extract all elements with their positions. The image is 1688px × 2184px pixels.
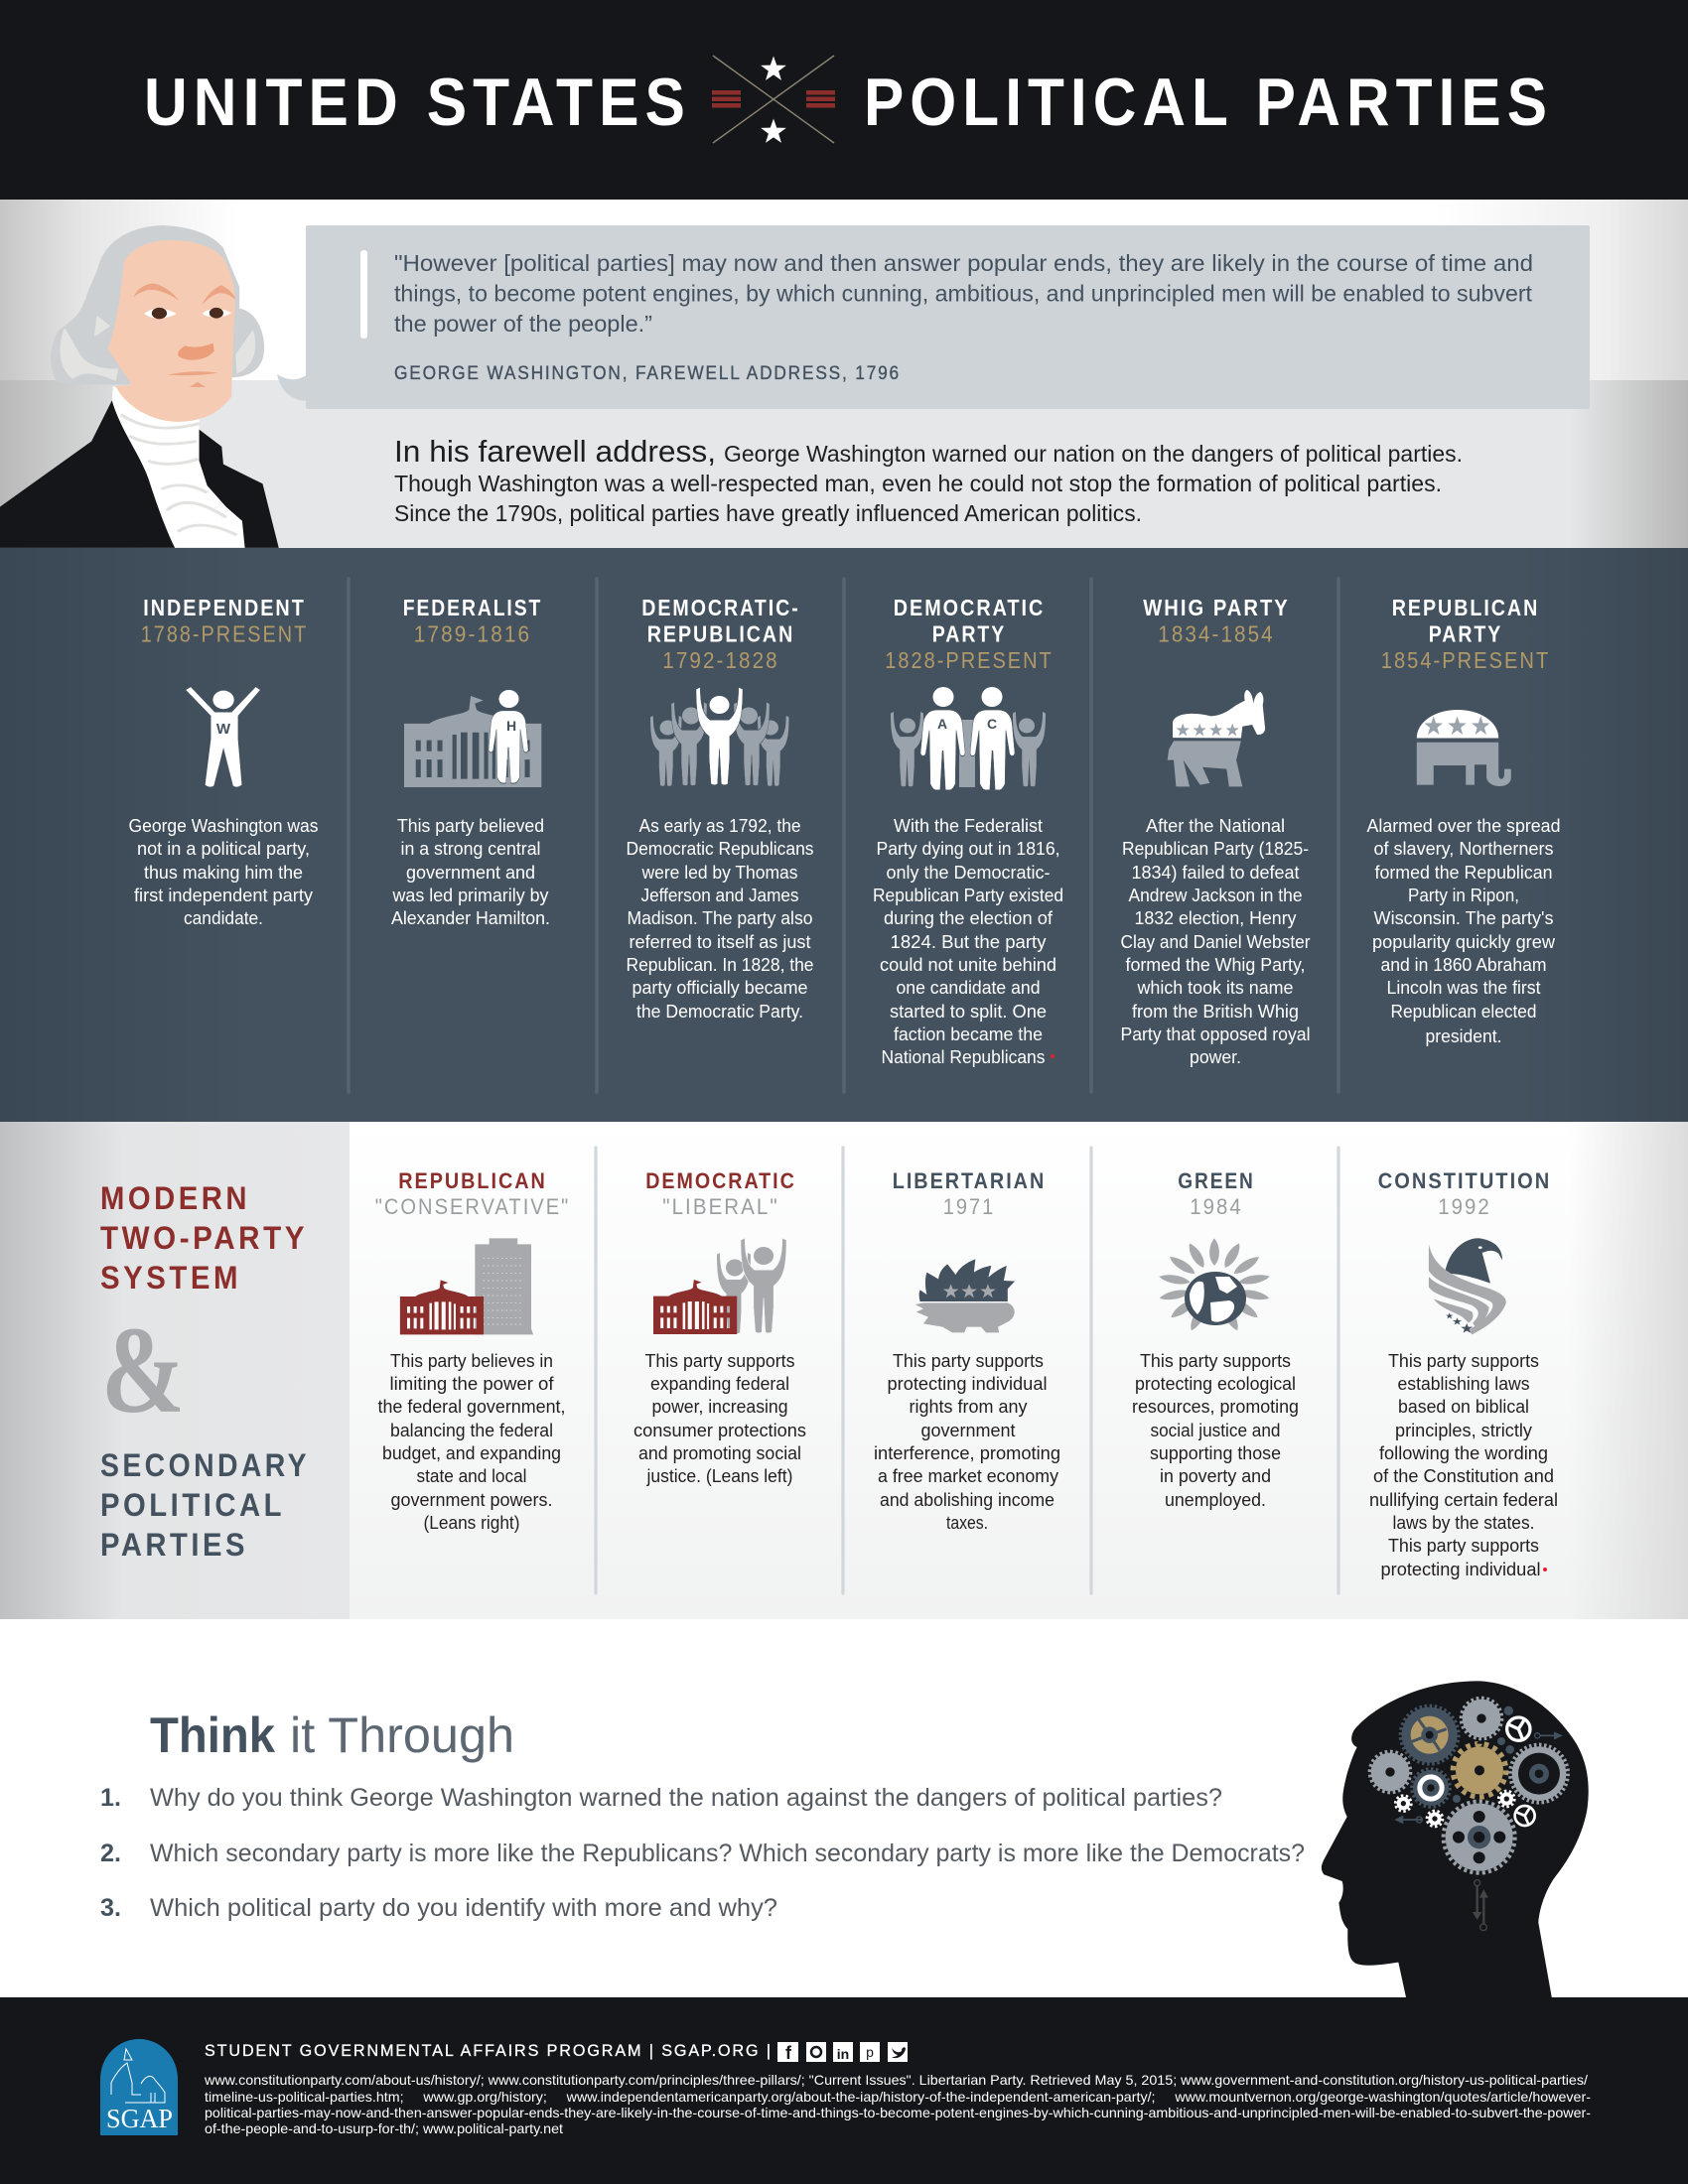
- description: [1120, 816, 1311, 1067]
- gear: grey upper: [1461, 1698, 1502, 1739]
- description: rights from any: [910, 1397, 1027, 1417]
- title: political parties: POLITICAL PARTIES: [864, 65, 1553, 140]
- sources: [204, 2072, 1591, 2136]
- heading: "CONSERVATIVE": [375, 1194, 570, 1219]
- heading: [641, 595, 800, 673]
- description: This party believes in: [390, 1351, 553, 1371]
- heading: 1834-1854: [1158, 621, 1275, 647]
- heading: GREEN: [1178, 1168, 1255, 1193]
- description: faction became the: [894, 1024, 1043, 1044]
- heading: 1984: [1190, 1194, 1243, 1219]
- heading: INDEPENDENT: [143, 595, 306, 620]
- heading: [1381, 595, 1550, 673]
- heading: DEMOCRATIC: [894, 595, 1045, 620]
- description: protecting individual: [1380, 1560, 1541, 1579]
- description: protecting ecological: [1135, 1374, 1296, 1394]
- header band: [0, 0, 1688, 200]
- description: Party dying out in 1816,: [876, 839, 1060, 859]
- heading: REPUBLICAN: [647, 621, 794, 647]
- heading: secondary political parties: POLITICAL: [100, 1487, 285, 1523]
- description: Republican Party existed: [873, 886, 1063, 905]
- title: united states: UNITED STATES: [144, 65, 691, 140]
- heading: secondary political parties: PARTIES: [100, 1527, 248, 1563]
- description: from the British Whig: [1132, 1002, 1299, 1022]
- description: first independent party: [134, 886, 313, 905]
- description: one candidate and: [896, 978, 1041, 998]
- description: [873, 816, 1063, 1067]
- heading: 1792-1828: [662, 647, 779, 673]
- heading: 1788-PRESENT: [141, 621, 308, 647]
- heading: Think: [150, 1707, 275, 1763]
- question 1: Why do you think George Washington warned the nation against the dangers of political parties?: [150, 1784, 1222, 1812]
- description: unemployed.: [1165, 1490, 1266, 1510]
- description: in a strong central: [401, 839, 540, 859]
- heading: DEMOCRATIC: [645, 1168, 796, 1193]
- white wheels: [1507, 1717, 1535, 1826]
- quote text: "However [political parties] may now and then answer popular ends, they are likely in the course of time and: [394, 250, 1533, 276]
- icon: globe and sunflower: [1158, 1239, 1271, 1332]
- description: 1832 election, Henry: [1134, 908, 1297, 928]
- description: After the National: [1146, 816, 1285, 836]
- description: supporting those: [1150, 1443, 1281, 1463]
- description: power, increasing: [651, 1397, 788, 1417]
- description: could not unite behind: [880, 955, 1056, 975]
- heading: REPUBLICAN: [1392, 595, 1539, 620]
- sources: timeline-us-political-parties.htm; www.gp.org/history; www.independentamericanparty.org/about-the-iap/history-of-the-independent-american-party/; www.mountvernon.org/george-washington/quotes/article/however-: [205, 2089, 1591, 2105]
- icon: donkey: [1168, 690, 1265, 786]
- heading: modern two-party system: [100, 1180, 308, 1296]
- description: George Washington was: [129, 816, 318, 836]
- introduction text: In his farewell address,: [394, 434, 716, 469]
- description: resources, promoting: [1132, 1397, 1299, 1417]
- description: limiting the power of: [389, 1374, 555, 1394]
- heading: modern two-party system: MODERN: [100, 1180, 250, 1216]
- description: establishing laws: [1398, 1374, 1529, 1394]
- heading: it Through: [290, 1707, 514, 1763]
- gear: grey large: [1444, 1802, 1515, 1873]
- description: This party supports: [645, 1351, 794, 1371]
- description: during the election of: [884, 908, 1054, 928]
- description: protecting individual: [888, 1374, 1047, 1394]
- icon: capitol and tower: [400, 1238, 533, 1334]
- heading: [403, 595, 542, 647]
- description: Democratic Republicans: [626, 839, 814, 859]
- heading: [150, 1707, 514, 1763]
- description: As early as 1792, the: [639, 816, 800, 836]
- footer band: [0, 1997, 1688, 2184]
- description: Alarmed over the spread: [1366, 816, 1561, 836]
- question 2: 2.: [100, 1840, 121, 1867]
- description: candidate.: [184, 908, 263, 928]
- description: This party supports: [1140, 1351, 1291, 1371]
- quote text: [394, 250, 1533, 337]
- description: [633, 1351, 806, 1486]
- speech bubble tail: [277, 374, 308, 401]
- description: the Democratic Party.: [636, 1002, 803, 1022]
- heading: secondary political parties: SECONDARY: [100, 1447, 310, 1483]
- description: budget, and expanding: [382, 1443, 561, 1463]
- description: Clay and Daniel Webster: [1120, 932, 1311, 952]
- heading: 1789-1816: [414, 621, 531, 647]
- description: [1369, 1351, 1558, 1579]
- description: based on biblical: [1398, 1397, 1529, 1417]
- column: constitution: [1369, 1168, 1558, 1579]
- quote text: the power of the people.”: [394, 311, 652, 337]
- icon: porcupine: [915, 1259, 1015, 1332]
- description: expanding federal: [650, 1374, 789, 1394]
- logo: sgap: [100, 2039, 178, 2135]
- heading: WHIG PARTY: [1143, 595, 1290, 620]
- social media icons: [777, 2042, 908, 2063]
- description: 1824. But the party: [890, 932, 1047, 952]
- heading: [1178, 1168, 1255, 1219]
- description: [874, 1351, 1060, 1533]
- gear: grey left: [1369, 1751, 1411, 1793]
- description: formed the Whig Party,: [1126, 955, 1305, 975]
- heading: CONSTITUTION: [1378, 1168, 1551, 1193]
- column: independent: W: [216, 721, 231, 738]
- icon: person with W: [186, 687, 260, 787]
- question 3: Which political party do you identify with more and why?: [150, 1894, 777, 1922]
- column: green: [1132, 1168, 1299, 1510]
- description: which took its name: [1137, 978, 1293, 998]
- icon: crossed lines emblem with stars and bars: [712, 56, 835, 143]
- description: 1834) failed to defeat: [1132, 863, 1299, 883]
- sources: of-the-people-and-to-usurp-for-th/; www.political-party.net: [205, 2120, 563, 2136]
- heading: DEMOCRATIC-: [641, 595, 800, 620]
- social media icons: in: [837, 2046, 849, 2062]
- introduction text: Though Washington was a well-respected man, even he could not stop the formation of political parties.: [394, 471, 1442, 496]
- heading: modern two-party system: TWO-PARTY: [100, 1220, 308, 1256]
- question 3: 3.: [100, 1894, 121, 1922]
- column: democratic-republican: [626, 595, 814, 1022]
- sources: www.constitutionparty.com/about-us/history/; www.constitutionparty.com/principles/three-pillars/; "Current Issues". Libertarian Party. Retrieved May 5, 2015; www.government-and-constitution.org/history-us-political-parties/: [204, 2072, 1588, 2088]
- icon: capitol and person with H: [404, 690, 541, 787]
- gear: grey right: [1510, 1745, 1568, 1803]
- description: popularity quickly grew: [1372, 932, 1556, 952]
- logo: sgap: SGAP: [106, 2104, 173, 2133]
- description: were led by Thomas: [641, 863, 798, 883]
- heading: secondary political parties: [100, 1447, 310, 1563]
- description: Andrew Jackson in the: [1128, 886, 1303, 905]
- introduction text: [394, 434, 1463, 526]
- description: Party that opposed royal: [1120, 1024, 1311, 1044]
- description: [626, 816, 814, 1022]
- description: Republican. In 1828, the: [626, 955, 814, 975]
- panel: party history: [0, 548, 1688, 1122]
- description: president.: [1426, 1026, 1501, 1046]
- heading: [645, 1168, 796, 1219]
- heading: "LIBERAL": [662, 1194, 779, 1219]
- description: party officially became: [632, 978, 808, 998]
- description: consumer protections: [633, 1421, 806, 1440]
- panel: modern system parties: [0, 1122, 1688, 1619]
- icon: elephant: [1417, 710, 1511, 786]
- description: of the Constitution and: [1373, 1466, 1554, 1486]
- column: whig party: [1120, 595, 1311, 1067]
- small white gears: [1395, 1791, 1514, 1827]
- heading: 1992: [1438, 1194, 1491, 1219]
- description: taxes.: [946, 1513, 988, 1533]
- icon: two leaders with supporters: C: [987, 716, 997, 732]
- description: balancing the federal: [390, 1421, 553, 1440]
- heading: modern two-party system: SYSTEM: [100, 1260, 241, 1296]
- heading: 1971: [943, 1194, 995, 1219]
- quote text: things, to become potent engines, by which cunning, ambitious, and unprincipled men will be enabled to subvert: [394, 280, 1533, 306]
- description: [377, 1351, 566, 1533]
- description: interference, promoting: [874, 1443, 1060, 1463]
- description: laws by the states.: [1392, 1513, 1535, 1533]
- quote attribution: GEORGE WASHINGTON, FAREWELL ADDRESS, 1796: [394, 363, 901, 384]
- description: justice. (Leans left): [646, 1466, 792, 1486]
- description: government and: [406, 863, 535, 883]
- heading: [141, 595, 308, 647]
- description: was led primarily by: [392, 886, 548, 905]
- gear: blue and white: [1412, 1769, 1450, 1807]
- social media icons: p: [866, 2044, 874, 2060]
- description: Republican elected: [1390, 1002, 1537, 1022]
- heading: 1828-PRESENT: [885, 647, 1054, 673]
- sidebar: section heading: [0, 1122, 350, 1619]
- introduction text: Since the 1790s, political parties have greatly influenced American politics.: [394, 500, 1142, 526]
- description: With the Federalist: [894, 816, 1043, 836]
- description: This party believed: [397, 816, 544, 836]
- description: [129, 816, 318, 928]
- description: not in a political party,: [137, 839, 310, 859]
- heading: [375, 1168, 570, 1219]
- column: democratic party: [873, 595, 1063, 1067]
- description: in poverty and: [1160, 1466, 1271, 1486]
- introduction text: George Washington warned our nation on the dangers of political parties.: [724, 441, 1463, 467]
- heading: [885, 595, 1054, 673]
- description: This party supports: [1388, 1351, 1539, 1371]
- illustration: head silhouette with gears: [1322, 1681, 1589, 2000]
- description: government powers.: [391, 1490, 552, 1510]
- illustration: george washington portrait: [0, 225, 279, 548]
- column: democratic liberal: [633, 1168, 806, 1486]
- social media icons: f: [785, 2043, 792, 2063]
- icon: two leaders with supporters: A: [937, 716, 947, 732]
- panel: washington quote and introduction: [0, 200, 1688, 548]
- description: a free market economy: [878, 1466, 1058, 1486]
- panel: think it through: [100, 1681, 1589, 2000]
- heading: REPUBLICAN: [398, 1168, 547, 1193]
- description: Madison. The party also: [628, 908, 812, 928]
- icon: group of people: [650, 687, 788, 786]
- heading: FEDERALIST: [403, 595, 542, 620]
- description: state and local: [417, 1466, 526, 1486]
- heading: PARTY: [1429, 621, 1502, 647]
- description: This party supports: [1388, 1536, 1539, 1556]
- blue dots: [1453, 1706, 1514, 1803]
- description: the federal government,: [377, 1397, 566, 1417]
- column: independent: [129, 595, 318, 928]
- heading: LIBERTARIAN: [893, 1168, 1046, 1193]
- description: This party supports: [893, 1351, 1044, 1371]
- heading: [893, 1168, 1046, 1219]
- description: National Republicans: [882, 1047, 1045, 1067]
- description: Alexander Hamilton.: [391, 908, 550, 928]
- description: formed the Republican: [1374, 863, 1553, 883]
- description: social justice and: [1150, 1421, 1281, 1440]
- description: and in 1860 Abraham: [1380, 955, 1547, 975]
- description: power.: [1190, 1047, 1241, 1067]
- quote box: [306, 225, 1590, 409]
- description: thus making him the: [144, 863, 303, 883]
- icon: eagle and flag: [1429, 1238, 1506, 1334]
- heading: [1378, 1168, 1551, 1219]
- ampersand: &: [101, 1302, 185, 1439]
- description: Wisconsin. The party's: [1374, 908, 1553, 928]
- description: of slavery, Northerners: [1374, 839, 1553, 859]
- program name: STUDENT GOVERNMENTAL AFFAIRS PROGRAM | SGAP.ORG |: [205, 2041, 773, 2060]
- description: and abolishing income: [880, 1490, 1055, 1510]
- description: referred to itself as just: [630, 932, 810, 952]
- arrows in head: [1394, 1731, 1563, 1931]
- description: Lincoln was the first: [1386, 978, 1541, 998]
- description: started to split. One: [890, 1002, 1047, 1022]
- description: and promoting social: [638, 1443, 801, 1463]
- description: [1132, 1351, 1299, 1510]
- description: following the wording: [1379, 1443, 1548, 1463]
- description: [391, 816, 550, 928]
- description: Jefferson and James: [641, 886, 798, 905]
- description: Party in Ripon,: [1408, 886, 1519, 905]
- description: (Leans right): [423, 1513, 520, 1533]
- gear: blue and tan: [1400, 1706, 1459, 1764]
- icon: two leaders with supporters: [891, 687, 1046, 790]
- description: principles, strictly: [1395, 1421, 1532, 1440]
- description: [1366, 816, 1561, 1046]
- question 1: 1.: [100, 1784, 121, 1812]
- question 2: Which secondary party is more like the Republicans? Which secondary party is more like the Democrats?: [150, 1840, 1305, 1867]
- column: federalist: [391, 595, 550, 928]
- heading: PARTY: [932, 621, 1006, 647]
- column: republican conservative: [375, 1168, 570, 1533]
- heading: 1854-PRESENT: [1381, 647, 1550, 673]
- gear: tan centre: [1453, 1744, 1506, 1797]
- heading: [1143, 595, 1290, 647]
- description: Republican Party (1825-: [1122, 839, 1309, 859]
- column: libertarian: [874, 1168, 1060, 1533]
- icon: capitol and person with H: H: [506, 718, 516, 734]
- sources: political-parties-may-now-and-then-answer-popular-ends-they-are-likely-in-the-course-of-time-and-things-to-become-potent-engines-by-which-cunning-ambitious-and-unprincipled-men-will-be-enabled-to-subvert-the-power-: [205, 2105, 1591, 2120]
- column: republican party: [1366, 595, 1561, 1046]
- description: only the Democratic-: [886, 863, 1051, 883]
- description: nullifying certain federal: [1369, 1490, 1558, 1510]
- description: government: [921, 1421, 1015, 1440]
- icon: capitol and people: [653, 1238, 786, 1334]
